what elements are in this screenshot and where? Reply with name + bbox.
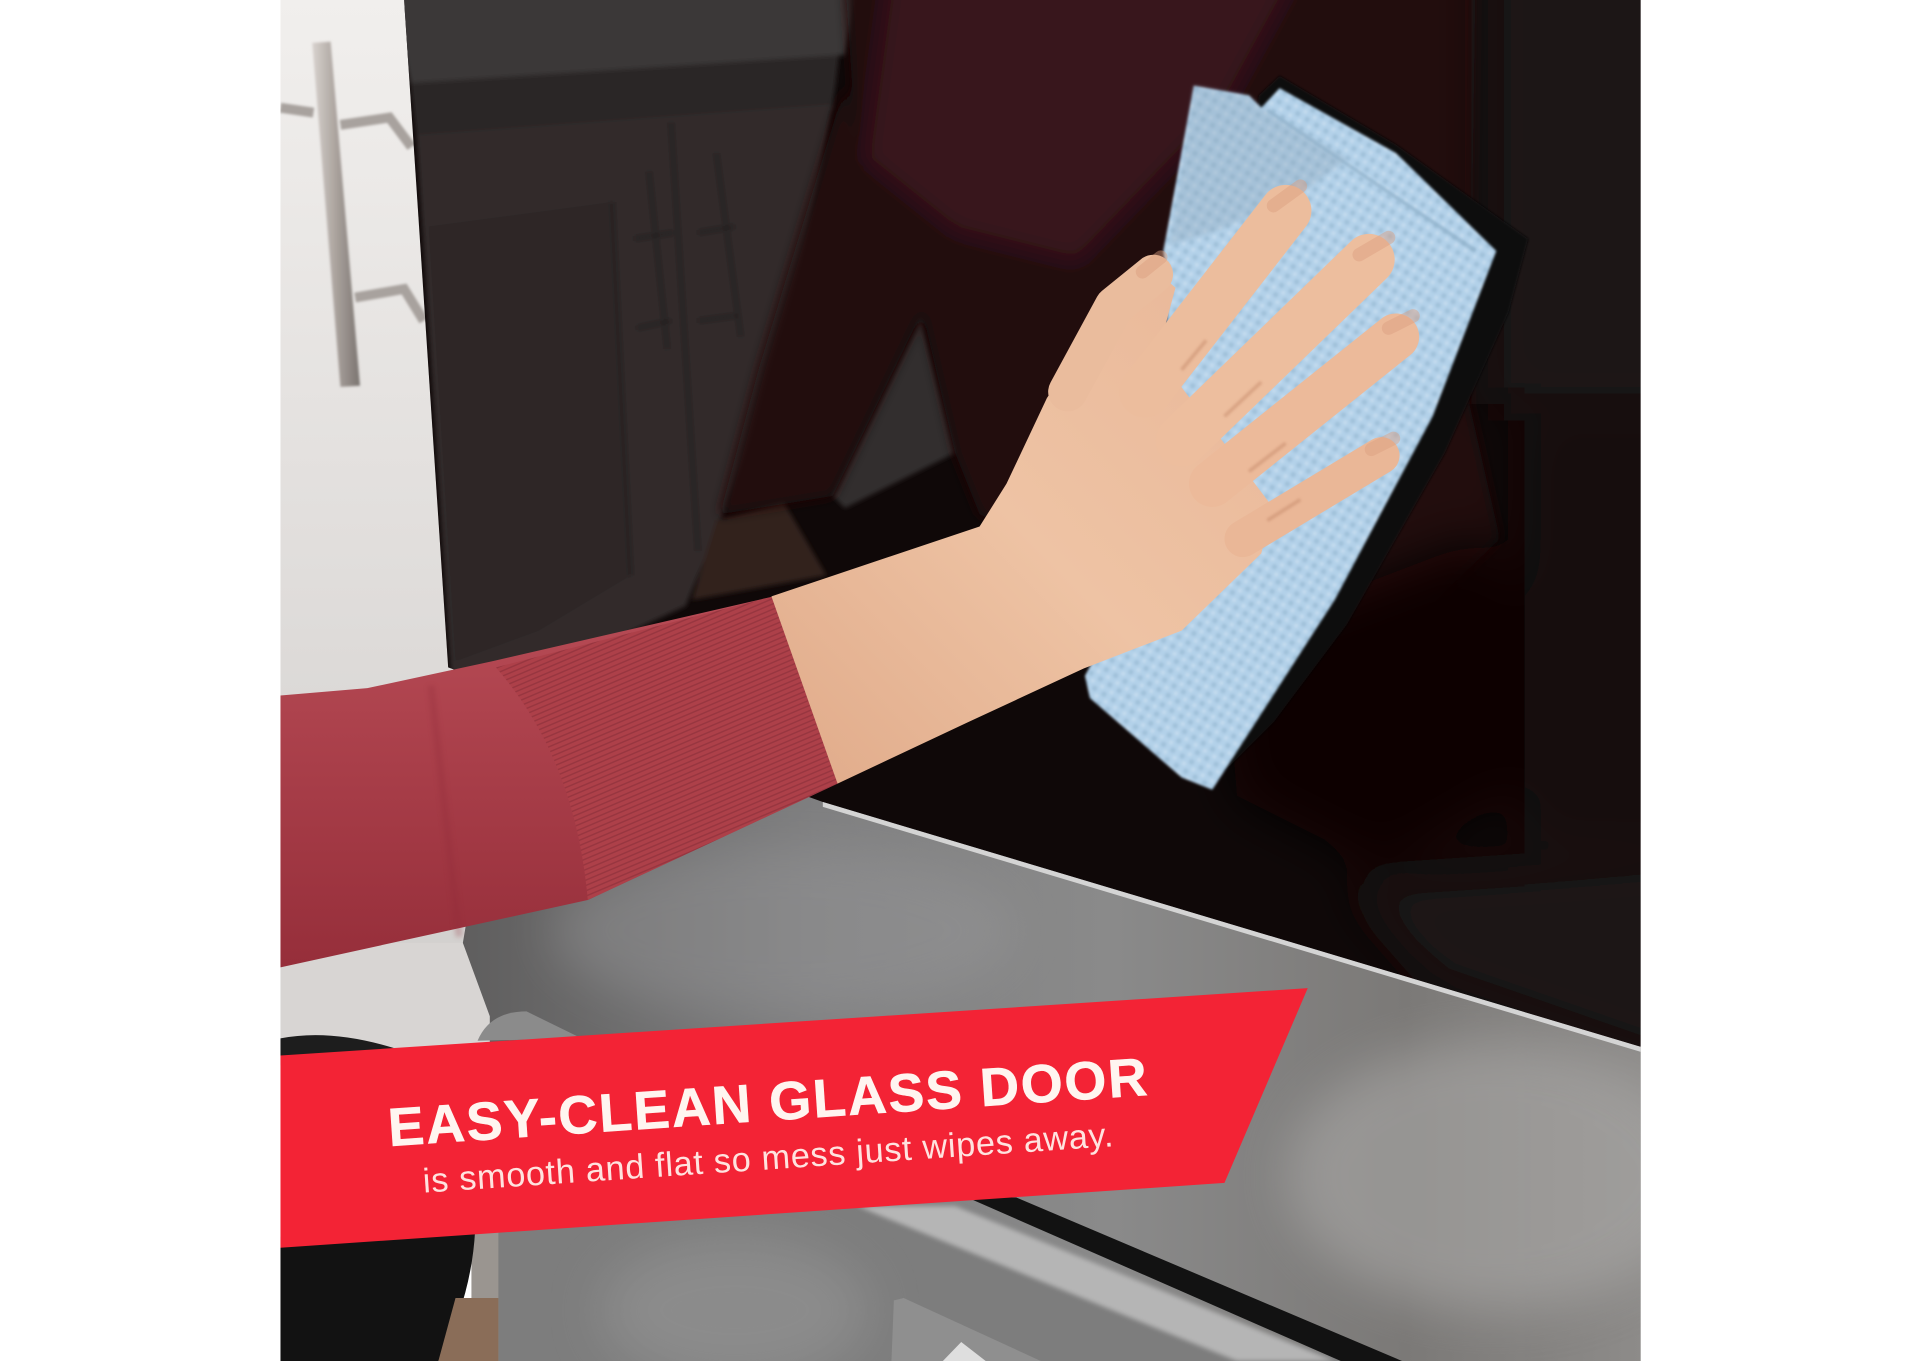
photo: kitchen oven scene bbox=[280, 0, 1733, 1361]
white cabinet bbox=[280, 0, 490, 1048]
fingernails bbox=[1142, 186, 1413, 449]
infographic: oven door photo with banner bbox=[280, 0, 1641, 1361]
index finger bbox=[1145, 211, 1286, 392]
reflection: dark trousers and floor bbox=[1312, 0, 1641, 1047]
middle finger bbox=[1182, 260, 1369, 441]
stainless steel oven body bbox=[463, 784, 1702, 1361]
stool and floor bbox=[280, 1011, 582, 1361]
little finger bbox=[1243, 456, 1381, 539]
hand and forearm bbox=[771, 186, 1413, 784]
black cloth layer bbox=[1232, 76, 1528, 764]
lower drawer and handle bbox=[496, 1198, 1402, 1361]
sweater sleeve bbox=[280, 596, 838, 967]
thumb bbox=[1068, 274, 1153, 392]
banner subtext: is smooth and flat so mess just wipes away. bbox=[422, 1116, 1114, 1201]
cleaning cloth bbox=[1085, 76, 1528, 790]
reflection: person in maroon sweater bbox=[718, 0, 1496, 583]
bright edge of glass door bbox=[823, 802, 1641, 1052]
dark glass door bbox=[404, 0, 1641, 1047]
cabinet handle bbox=[280, 42, 424, 387]
blue waffle cloth bbox=[1085, 86, 1496, 790]
ring finger bbox=[1212, 337, 1396, 484]
reflection: kitchen wall and cabinets bbox=[392, 0, 955, 686]
red banner bbox=[280, 988, 1308, 1248]
banner headline: EASY-CLEAN GLASS DOOR bbox=[386, 1047, 1149, 1158]
